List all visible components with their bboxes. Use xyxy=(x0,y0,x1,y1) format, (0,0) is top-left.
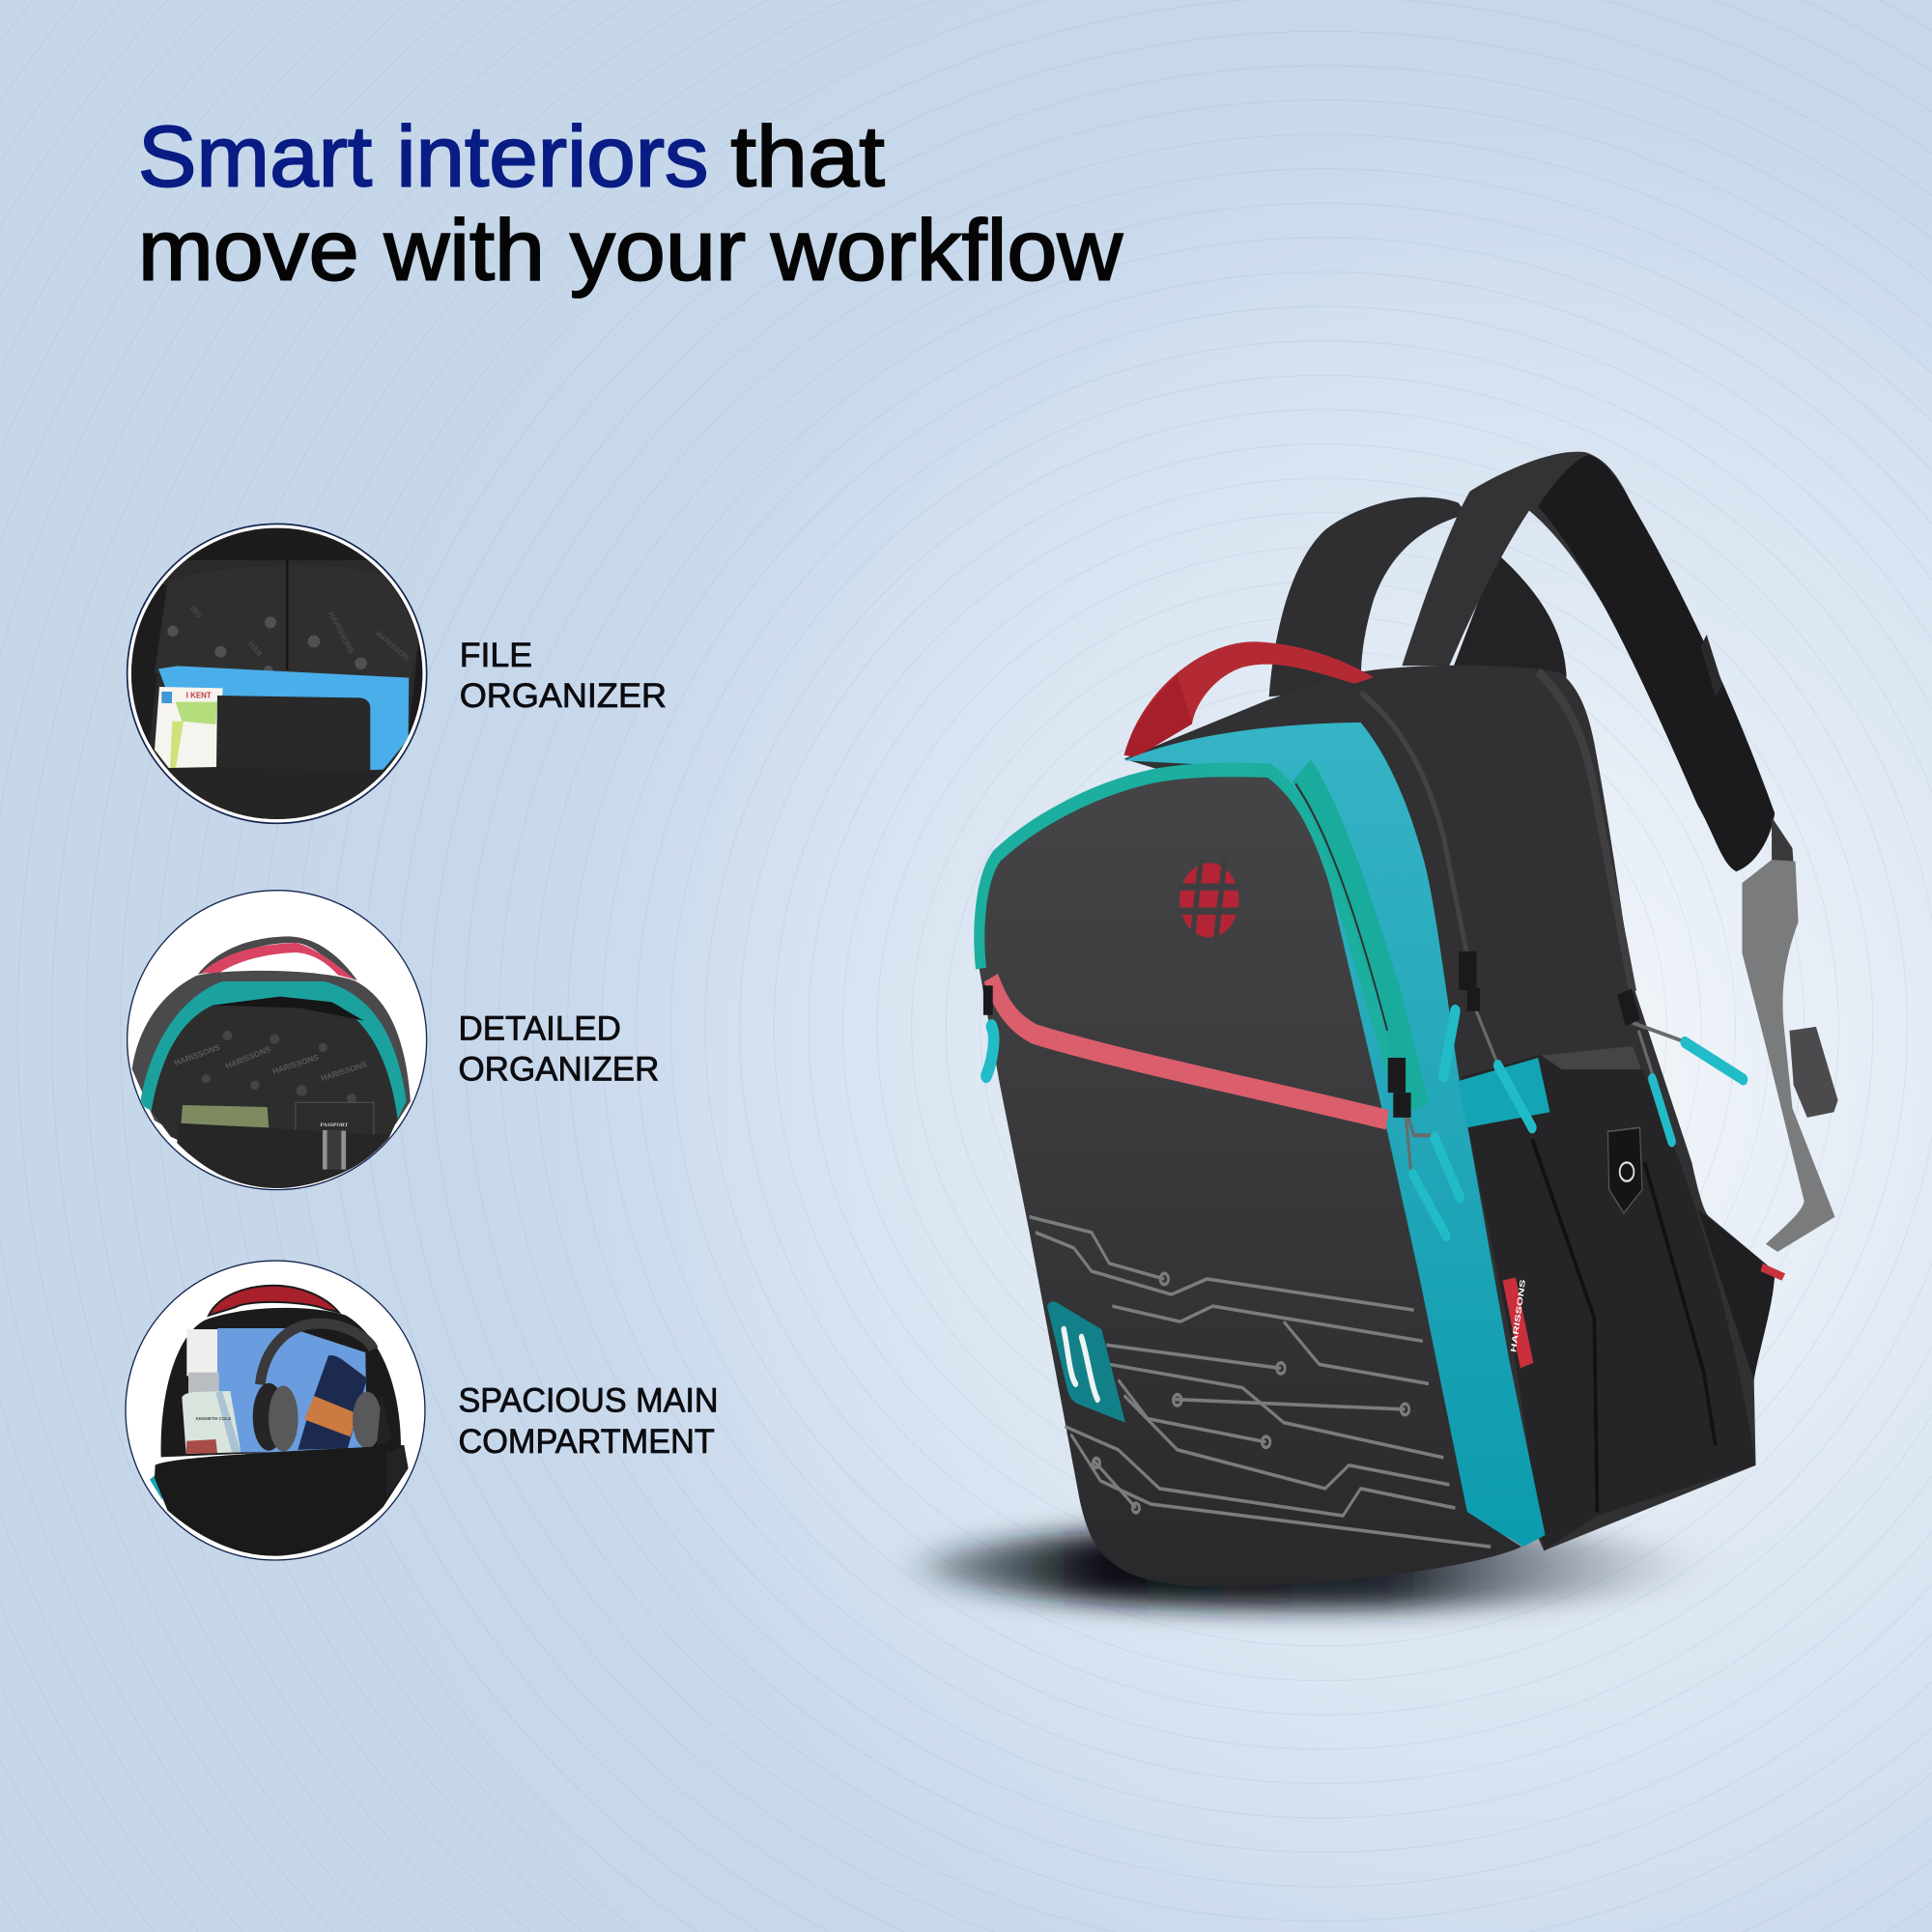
green zipper binding xyxy=(980,770,1391,1069)
teal side strip xyxy=(1124,723,1546,1547)
callout: detailed organizer xyxy=(128,891,659,1190)
photo circle: detailed organizer: HARISSONS xyxy=(320,1059,368,1083)
callout: file organizer xyxy=(128,524,667,824)
label: file organizer: FILE xyxy=(460,637,532,674)
label: file organizer: ORGANIZER xyxy=(460,677,667,715)
circuit pattern xyxy=(1030,1217,1491,1547)
left shoulder strap xyxy=(1269,497,1467,696)
photo circle: detailed organizer: PASSPORT xyxy=(321,1122,349,1128)
photo circle: detailed organizer xyxy=(128,891,427,1190)
label: detailed organizer: ORGANIZER xyxy=(458,1051,659,1089)
photo circle: detailed organizer: HARISSONS xyxy=(224,1044,272,1070)
red brand label xyxy=(1502,1277,1533,1368)
callout: spacious main compartment xyxy=(126,1261,719,1560)
grey webbing strap xyxy=(1742,817,1838,1252)
front panel xyxy=(980,769,1521,1586)
photo circle: file organizer: HARISSON xyxy=(374,629,411,662)
red brand label: HARISSONS xyxy=(1509,1279,1527,1353)
title: that xyxy=(730,108,885,205)
photo circle: detailed organizer: HARISSONS xyxy=(271,1052,320,1076)
label: file organizer xyxy=(460,637,667,715)
main body xyxy=(1124,666,1775,1550)
label: detailed organizer xyxy=(458,1010,659,1089)
photo circle: file organizer: I KENT xyxy=(186,692,212,700)
side pocket xyxy=(1462,1046,1756,1550)
top carry handle xyxy=(1124,641,1374,757)
teal loop strap xyxy=(1459,1058,1549,1127)
coral zipper band xyxy=(991,978,1387,1120)
photo circle: file organizer: HIS xyxy=(188,605,204,620)
backpack illustration xyxy=(980,452,1838,1586)
zipper pulls xyxy=(983,952,1744,1236)
right shoulder strap xyxy=(1402,452,1775,871)
photo circle: spacious main compartment: KENNETH COLE xyxy=(196,1416,231,1421)
pocket badge xyxy=(1607,1127,1642,1213)
teal circuit patch xyxy=(1047,1301,1125,1423)
front logo xyxy=(1179,860,1240,941)
rear padding xyxy=(1698,1209,1775,1379)
title: Smart interiors xyxy=(138,108,708,205)
title: move with your workflow xyxy=(138,202,1123,298)
photo circle: file organizer: HARISSONS xyxy=(327,611,356,655)
side zip seams xyxy=(1361,672,1633,992)
title xyxy=(138,108,1123,298)
photo circle: spacious main compartment xyxy=(126,1261,425,1560)
label: spacious main compartment: COMPARTMENT xyxy=(458,1423,715,1461)
photo circle: file organizer xyxy=(128,524,427,824)
label: spacious main compartment xyxy=(458,1382,719,1461)
label: spacious main compartment: SPACIOUS MAIN xyxy=(458,1382,719,1420)
photo circle: file organizer: HAR xyxy=(246,639,264,658)
photo circle: detailed organizer: HARISSONS xyxy=(173,1042,221,1067)
label: detailed organizer: DETAILED xyxy=(458,1010,621,1048)
ground shadow xyxy=(924,1525,1713,1609)
